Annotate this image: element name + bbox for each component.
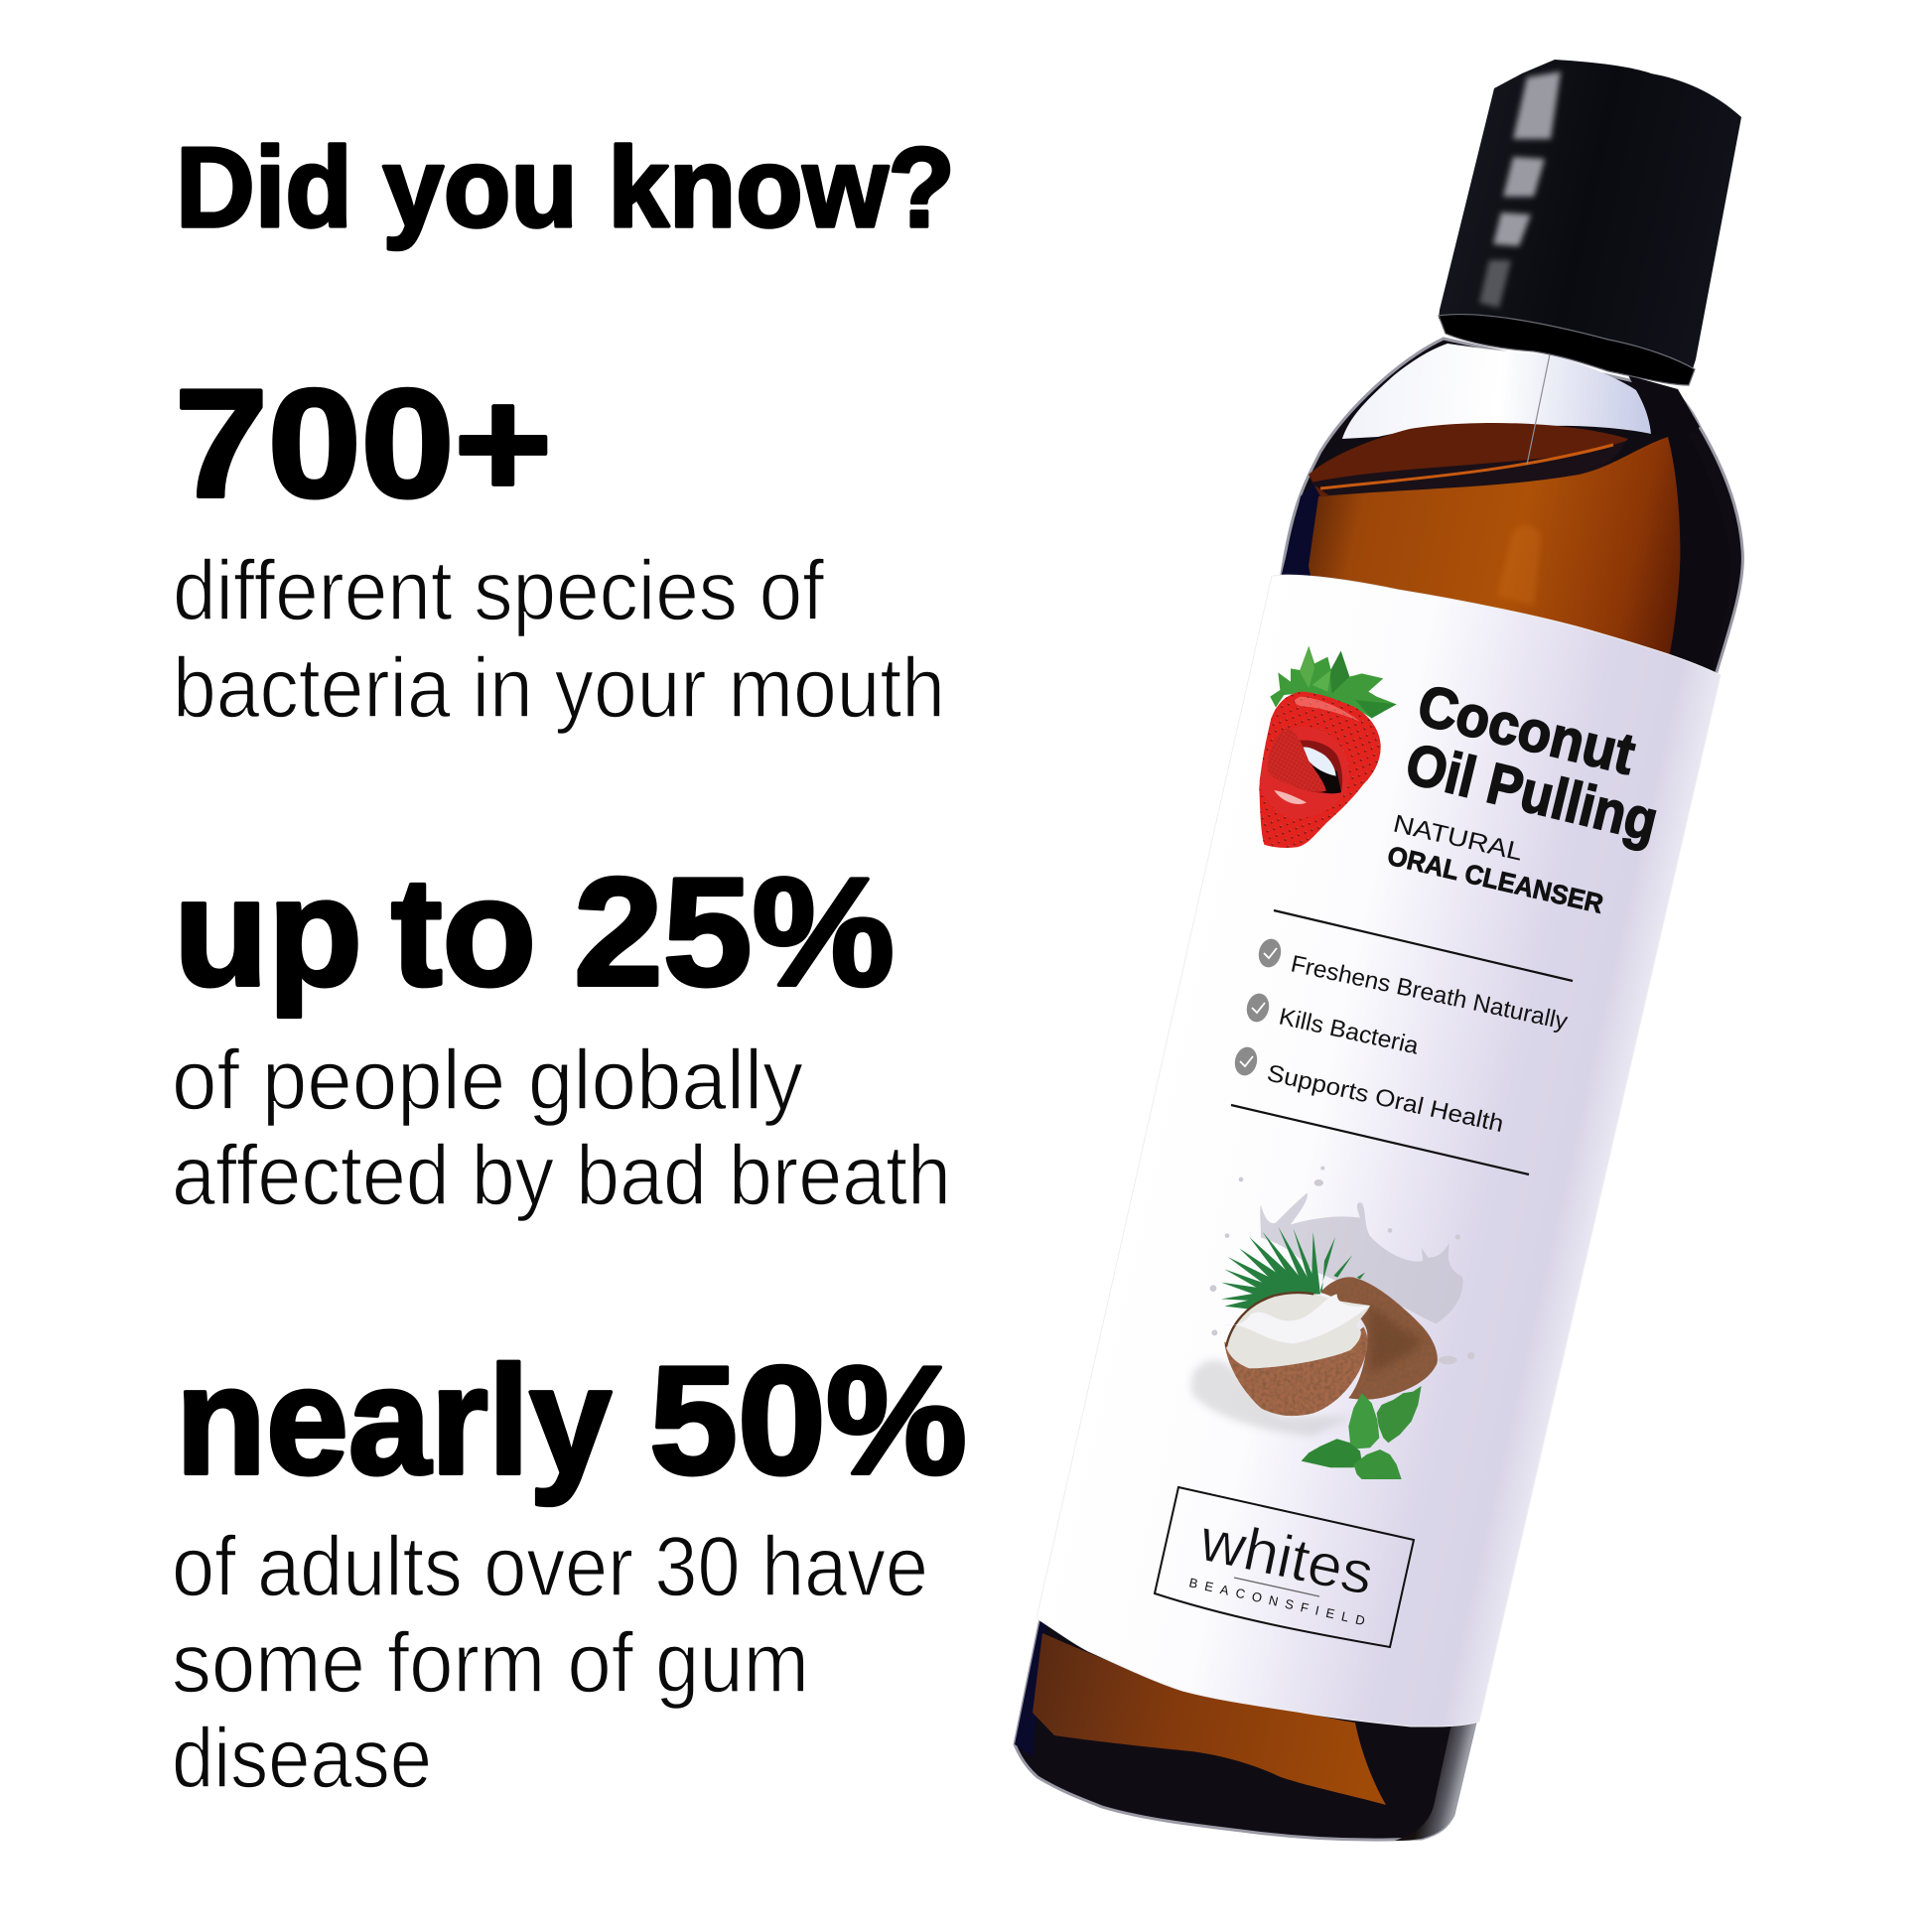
mint leaves [1302, 1386, 1422, 1479]
front coconut bowl [1224, 1327, 1367, 1416]
benefit: supports oral health: Supports Oral Health [1265, 1059, 1506, 1138]
label subtitle: natural oral cleanser [1385, 810, 1606, 919]
amber oil [1309, 437, 1680, 667]
label title: coconut oil pulling: Coconut [1412, 672, 1641, 787]
vertical seam reflection [1527, 354, 1550, 465]
stat number: nearly 50%: 50% [649, 1334, 967, 1506]
left navy glass edge [1015, 477, 1320, 1757]
tongue texture [1268, 728, 1326, 792]
cap highlight [1479, 71, 1561, 308]
stat block: up to 25% bad breath [172, 846, 951, 1223]
stat description: bad breath: of people globally [172, 1034, 803, 1128]
coconut rim [1226, 1293, 1313, 1347]
right dark glass band [1668, 402, 1730, 673]
coconut illustration [1191, 1167, 1474, 1479]
stat block: 700+ bacteria species [173, 357, 945, 736]
product: tilted amber bottle [1015, 60, 1742, 1841]
strawberry tongue [1268, 728, 1326, 792]
label title: coconut oil pulling [1400, 672, 1664, 854]
black cap [1439, 60, 1741, 385]
coconut milk flesh [1226, 1293, 1370, 1368]
strawberry body [1259, 692, 1381, 848]
oil upper surface [1309, 423, 1628, 496]
dark right shoulder [1628, 375, 1700, 442]
label title: coconut oil pulling: Oil Pulling [1400, 731, 1664, 854]
stat number: up to 25% [174, 846, 895, 1018]
whites beaconsfield logo box [1155, 1487, 1414, 1647]
strawberry gloss [1295, 697, 1360, 722]
stat number: up to 25%: 25% [574, 846, 895, 1018]
logo word: whites: whites [1193, 1506, 1379, 1607]
benefit: freshens breath: Freshens Breath Naturally [1289, 950, 1570, 1035]
bottle glass body [1015, 339, 1742, 1840]
oil surface dark streak [1311, 441, 1626, 496]
shoulder highlight [1342, 344, 1651, 439]
oil surface orange line [1320, 445, 1613, 488]
benefit: supports oral health [1232, 1044, 1506, 1138]
stat number: nearly 50% [176, 1334, 967, 1506]
stat description: bad breath: affected by bad breath [172, 1129, 951, 1223]
stat number: 700+: 700+ [175, 357, 552, 529]
stat description: gum disease: some form of gum [172, 1616, 809, 1711]
benefit: kills bacteria [1244, 991, 1422, 1060]
benefit list [1232, 936, 1570, 1138]
logo word: beaconsfield: BEACONSFIELD [1187, 1575, 1366, 1628]
teeth [1303, 747, 1336, 776]
lower amber glass [1033, 1633, 1386, 1805]
stat description: bacteria species [173, 544, 945, 736]
stat description: bacteria species: bacteria in your mouth [173, 641, 945, 736]
stat description: gum disease: disease [172, 1712, 432, 1806]
strawberry mouth illustration [1259, 646, 1397, 848]
heading: did you know: Did you know? [176, 125, 955, 251]
lip highlight [1274, 790, 1307, 804]
paper label [1036, 575, 1721, 1726]
back coconut half [1320, 1277, 1438, 1400]
red lips [1260, 727, 1349, 819]
stat description: gum disease: of adults over 30 have [172, 1520, 928, 1614]
benefit: kills bacteria: Kills Bacteria [1277, 1003, 1422, 1060]
strawberry seeds [1259, 692, 1381, 848]
ground shadow [1191, 1360, 1353, 1437]
stat number: nearly 50%: nearly [176, 1334, 612, 1506]
cap lower rim [1439, 315, 1695, 385]
label subtitle: natural oral cleanser: ORAL CLEANSER [1385, 841, 1606, 919]
strawberry leaves [1270, 646, 1397, 718]
mouth interior [1291, 741, 1342, 793]
stat description: gum disease [172, 1520, 928, 1806]
milk swirl [1223, 1294, 1370, 1343]
palm frond [1221, 1227, 1365, 1311]
dark throat [1312, 766, 1341, 793]
back coconut shading [1367, 1304, 1423, 1373]
lower silver edge [1395, 1723, 1475, 1841]
stat number: up to 25%: to [391, 846, 536, 1018]
stat description: bacteria species: different species of [173, 544, 824, 638]
stat number: up to 25%: up [174, 846, 362, 1018]
stat description: bad breath [172, 1034, 951, 1223]
milk splash [1260, 1193, 1463, 1323]
splash droplets [1210, 1167, 1474, 1364]
stat block: nearly 50% gum disease [172, 1334, 967, 1806]
label subtitle: natural oral cleanser: NATURAL [1391, 810, 1526, 867]
oil inner reflection [1497, 525, 1541, 606]
